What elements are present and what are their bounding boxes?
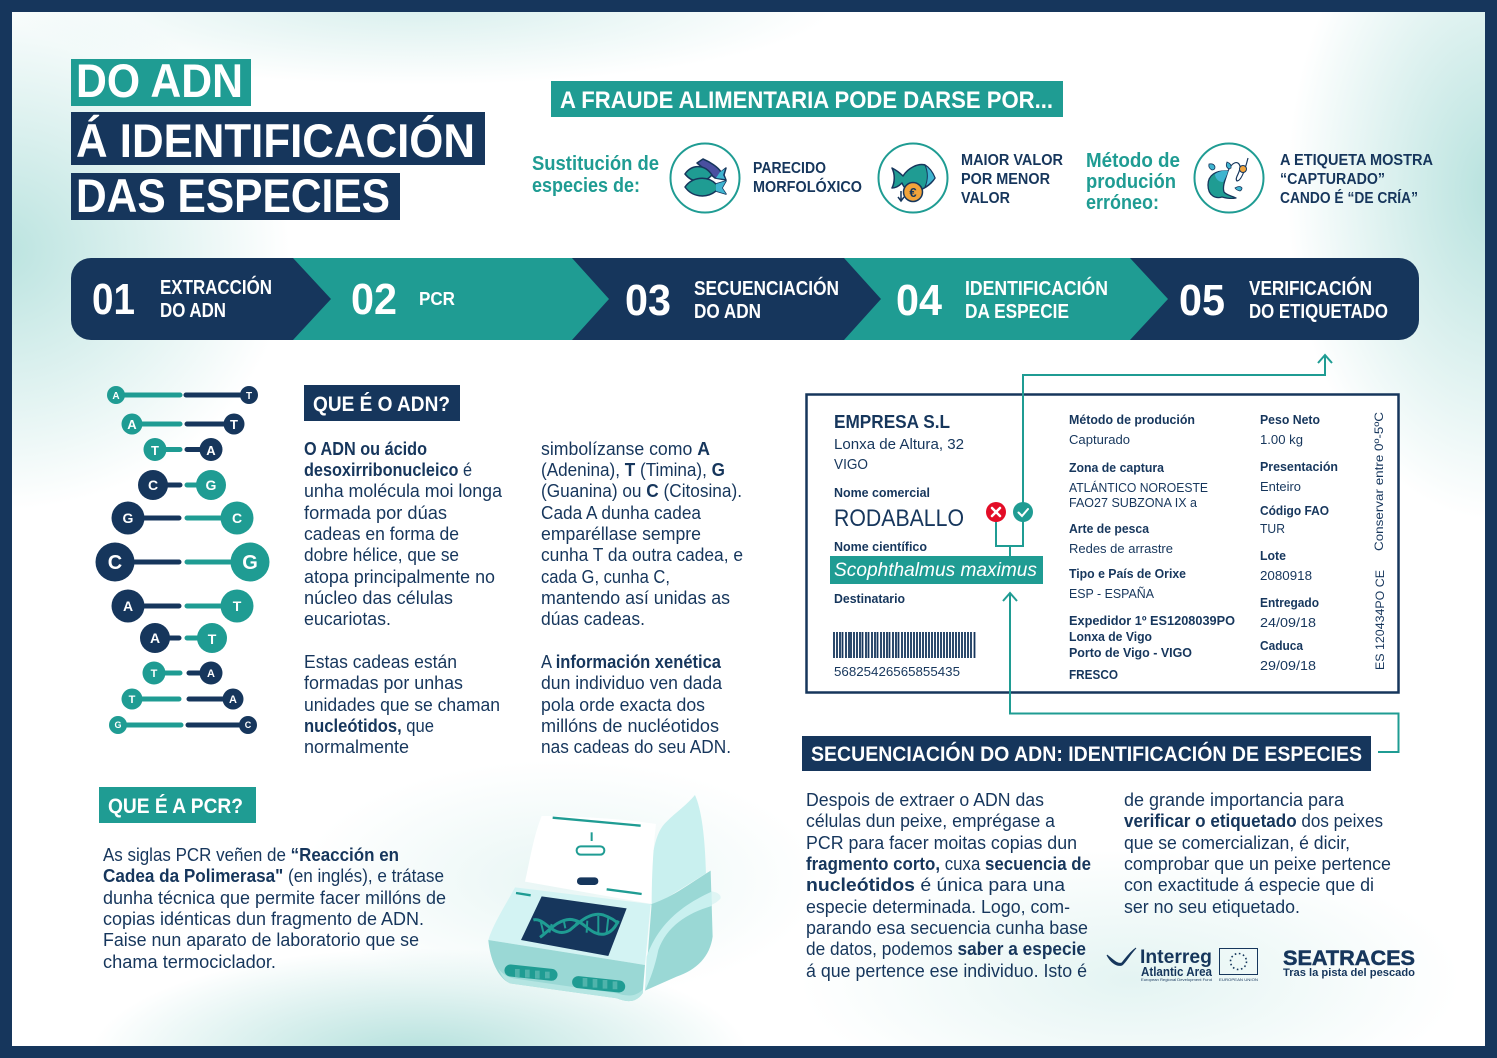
step 05: VERIFICACIÓN xyxy=(1249,276,1372,300)
text: DNA column 2: pola orde exacta dos xyxy=(541,695,705,715)
icon: DNA base pairs: G xyxy=(242,552,258,574)
step 05: 05 xyxy=(1179,276,1225,325)
logo: Seatraces: SEATRACES xyxy=(1283,947,1415,970)
text: PCR explanation: Faise nun aparato de laboratorio que se xyxy=(103,930,419,950)
label: company and names xyxy=(830,412,1043,606)
label: weight and dates: 29/09/18 xyxy=(1260,659,1316,673)
connector: bracket under the marks xyxy=(996,520,1023,556)
label: production details: Zona de captura xyxy=(1069,461,1165,475)
step 03: DO ADN xyxy=(694,301,761,323)
text: DNA column 2: cada G, cunha C, xyxy=(541,567,670,587)
text: sequencing column 2 xyxy=(1124,790,1391,917)
text: DNA column 1: formadas por unhas xyxy=(304,673,463,693)
step 03 xyxy=(625,276,839,325)
text: DNA column 1: unidades que se chaman xyxy=(304,695,500,715)
icon: DNA base pairs: T xyxy=(151,443,159,458)
icon: DNA base pairs: T xyxy=(208,631,217,647)
step 02 xyxy=(351,275,455,324)
label: weight and dates: Lote xyxy=(1260,549,1286,563)
label: production details: Tipo e País de Orixe xyxy=(1069,567,1186,581)
step 04 chevron xyxy=(844,258,1168,340)
logo: Interreg Atlantic Area: European Regional Development Fund xyxy=(1141,977,1212,982)
text: DNA column 2: simbolízanse como A xyxy=(541,439,710,459)
text: wrong production method: Método de xyxy=(1086,150,1180,172)
text: DNA column 2 xyxy=(541,439,743,757)
label: weight and dates: Caduca xyxy=(1260,639,1304,653)
step 04: 04 xyxy=(896,276,942,325)
step 03: SECUENCIACIÓN xyxy=(694,276,839,300)
step 01: 01 xyxy=(92,275,135,324)
text: DNA column 1: Estas cadeas están xyxy=(304,652,457,672)
label: production details: ESP - ESPAÑA xyxy=(1069,587,1155,601)
text: DNA column 1: núcleo das células xyxy=(304,588,453,608)
label: company and names: Nome comercial xyxy=(834,486,930,500)
label: weight and dates: Presentación xyxy=(1260,460,1338,474)
text: sequencing column 1: parando esa secuencia cunha base xyxy=(806,918,1088,938)
label: production details: FRESCO xyxy=(1069,668,1118,682)
text: label shows captured: A ETIQUETA MOSTRA xyxy=(1280,152,1433,169)
label: company and names: Nome científico xyxy=(834,540,927,554)
text: higher value for lower value xyxy=(961,152,1063,207)
text: wrong production method xyxy=(1086,150,1180,214)
label: company and names: RODABALLO xyxy=(834,505,964,532)
panel: what is PCR xyxy=(99,787,721,1001)
label: vertical storage text: Conservar entre 0º-5ºC xyxy=(1372,412,1386,551)
step 04: DA ESPECIE xyxy=(965,301,1069,323)
text: sequencing column 2: verificar o etiquetado dos peixes xyxy=(1124,811,1383,831)
step 02 chevron xyxy=(293,258,609,340)
icon: DNA base pairs: A xyxy=(123,598,133,614)
step 01: DO ADN xyxy=(160,300,226,322)
text: sequencing column 2: de grande importancia para xyxy=(1124,790,1345,810)
label: company and names: Lonxa de Altura, 32 xyxy=(834,437,964,453)
text: PCR explanation: chama termociclador. xyxy=(103,952,276,972)
title: DO ADN xyxy=(76,54,243,107)
icon: DNA base pairs: A xyxy=(150,630,160,646)
heading: what is PCR xyxy=(99,787,256,823)
step 02: 02 xyxy=(351,275,397,324)
label: company and names: Scophthalmus maximus xyxy=(834,560,1037,581)
text: morphological similarity: PARECIDO xyxy=(753,160,826,177)
label: company and names: Destinatario xyxy=(834,592,905,606)
panel: food fraud xyxy=(532,81,1433,214)
icon: DNA base pairs: A xyxy=(229,694,237,706)
title: Á IDENTIFICACIÓN xyxy=(76,114,475,167)
text: DNA column 1: O ADN ou ácido xyxy=(304,439,427,459)
icon: fish with euro: € xyxy=(909,185,917,200)
text: DNA column 1: cadeas en forma de xyxy=(304,524,459,544)
logo: Seatraces xyxy=(1283,947,1415,979)
text: PCR explanation xyxy=(103,845,446,972)
icon: DNA base pairs: A xyxy=(127,417,137,432)
panel: what is DNA xyxy=(304,385,743,757)
text: sequencing column 1 xyxy=(806,790,1091,981)
arrow: correct name to labelling verification xyxy=(1023,355,1332,522)
text: sequencing column 2: comprobar que un peixe pertence xyxy=(1124,854,1391,874)
label: weight and dates: TUR xyxy=(1260,522,1285,536)
icon: DNA base pairs: T xyxy=(230,417,238,432)
text: DNA column 1: unha molécula moi longa xyxy=(304,481,503,501)
heading: DNA sequencing: SECUENCIACIÓN DO ADN: IDENTIFICACIÓN DE ESPECIES xyxy=(811,741,1362,766)
text: sequencing column 1: Despois de extraer o ADN das xyxy=(806,790,1044,810)
text: higher value for lower value: MAIOR VALOR xyxy=(961,152,1063,169)
text: sequencing column 2: que se comercializan, é dicir, xyxy=(1124,833,1350,853)
text: DNA column 2: A información xenética xyxy=(541,652,722,672)
icon: DNA base pairs: G xyxy=(114,720,122,730)
label: company and names: VIGO xyxy=(834,457,868,473)
icon: correct mark xyxy=(1013,502,1033,522)
label: weight and dates: 24/09/18 xyxy=(1260,616,1316,630)
label: production details: Método de produción xyxy=(1069,413,1195,427)
text: DNA column 1: atopa principalmente no xyxy=(304,567,495,587)
heading: food fraud: A FRAUDE ALIMENTARIA PODE DARSE POR... xyxy=(560,87,1053,114)
icon: DNA base pairs: C xyxy=(232,510,242,526)
label: weight and dates: Entregado xyxy=(1260,596,1319,610)
logo: Interreg Atlantic Area xyxy=(1107,947,1258,982)
label: weight and dates: 1.00 kg xyxy=(1260,433,1303,447)
text: sequencing column 1: nucleótidos é única para una xyxy=(806,875,1066,895)
logo: Interreg Atlantic Area: EUROPEAN UNION xyxy=(1219,977,1258,982)
heading: DNA sequencing xyxy=(802,736,1371,771)
text: label shows captured: “CAPTURADO” xyxy=(1280,171,1385,188)
label: production details: Expedidor 1º ES1208039PO xyxy=(1069,614,1235,628)
icon: DNA base pairs: T xyxy=(129,694,136,706)
step 04 xyxy=(896,276,1108,325)
icon: DNA base pairs: T xyxy=(151,668,158,680)
label: weight and dates: 2080918 xyxy=(1260,569,1312,583)
heading: what is PCR: QUE É A PCR? xyxy=(108,795,243,818)
barcode xyxy=(834,632,974,679)
label: production details: ATLÁNTICO NOROESTE xyxy=(1069,480,1208,495)
text: sequencing column 1: de datos, podemos saber a especie xyxy=(806,939,1086,959)
label: production details: Redes de arrastre xyxy=(1069,542,1173,556)
text: morphological similarity xyxy=(753,160,862,196)
text: sequencing column 1: PCR para facer moitas copias dun xyxy=(806,833,1077,853)
text: DNA column 1: nucleótidos, que xyxy=(304,716,434,736)
icon: DNA base pairs: C xyxy=(148,477,158,493)
barcode: 56825426565855435 xyxy=(834,664,960,679)
text: DNA column 2: Cada A dunha cadea xyxy=(541,503,702,523)
text: DNA column 1 xyxy=(304,439,503,757)
icon: DNA base pairs: G xyxy=(206,477,217,493)
label: production details: Lonxa de Vigo xyxy=(1069,630,1152,644)
title xyxy=(71,54,485,222)
text: label shows captured: CANDO É “DE CRÍA” xyxy=(1280,188,1418,207)
label: vertical storage text: ES 120434PO CE xyxy=(1373,570,1387,670)
label: production details: Capturado xyxy=(1069,433,1130,447)
label: production details: FAO27 SUBZONA IX a xyxy=(1069,496,1197,510)
title: DAS ESPECIES xyxy=(76,169,390,222)
panel: DNA sequencing xyxy=(802,736,1391,981)
text: sequencing column 1: especie determinada. Logo, com- xyxy=(806,897,1070,917)
process bar xyxy=(71,258,1419,340)
text: DNA column 2: emparéllase sempre xyxy=(541,524,701,544)
text: species substitution: Sustitución de xyxy=(532,153,659,175)
text: DNA column 2: cunha T da outra cadea, e xyxy=(541,545,743,565)
text: DNA column 1: formada por dúas xyxy=(304,503,447,523)
label: company and names: EMPRESA S.L xyxy=(834,412,950,432)
text: species substitution xyxy=(532,153,659,197)
text: DNA column 1: dobre hélice, que se xyxy=(304,545,459,565)
icon: DNA base pairs: A xyxy=(207,668,215,680)
icon: fish with euro xyxy=(878,144,948,212)
label: production details: Porto de Vigo - VIGO xyxy=(1069,646,1192,660)
text: DNA column 1: normalmente xyxy=(304,737,409,757)
label: weight and dates: Enteiro xyxy=(1260,480,1301,494)
step 03: 03 xyxy=(625,276,671,325)
icon: wrong mark xyxy=(986,502,1006,522)
step 04: IDENTIFICACIÓN xyxy=(965,276,1108,300)
logo: Seatraces: Tras la pista del pescado xyxy=(1283,967,1415,979)
step 01: EXTRACCIÓN xyxy=(160,275,272,299)
text: DNA column 2: (Adenina), T (Timina), G xyxy=(541,460,725,480)
text: morphological similarity: MORFOLÓXICO xyxy=(753,177,862,196)
icon: DNA base pairs: C xyxy=(245,720,252,730)
text: higher value for lower value: VALOR xyxy=(961,190,1010,207)
label: weight and dates: Código FAO xyxy=(1260,504,1329,518)
text: PCR explanation: dunha técnica que permite facer millóns de xyxy=(103,888,446,908)
step 05: DO ETIQUETADO xyxy=(1249,301,1388,323)
icon: DNA base pairs: C xyxy=(108,552,122,574)
text: PCR explanation: As siglas PCR veñen de “Reacción en xyxy=(103,845,399,865)
text: sequencing column 1: células dun peixe, emprégase a xyxy=(806,811,1056,831)
text: DNA column 2: (Guanina) ou C (Citosina). xyxy=(541,481,742,501)
label: vertical storage text xyxy=(1372,412,1387,670)
heading: what is DNA xyxy=(304,385,460,421)
step 02: PCR xyxy=(419,289,455,309)
step 01 xyxy=(92,275,272,324)
text: sequencing column 1: á que pertence ese individuo. Isto é xyxy=(806,961,1087,981)
text: sequencing column 2: con exactitude á especie que di xyxy=(1124,875,1374,895)
text: higher value for lower value: POR MENOR xyxy=(961,171,1050,188)
text: DNA column 2: millóns de nucléotidos xyxy=(541,716,719,736)
icon: thermocycler xyxy=(488,795,721,1001)
text: sequencing column 1: fragmento corto, cuxa secuencia de xyxy=(806,854,1091,874)
text: label shows captured xyxy=(1280,152,1433,207)
text: DNA column 2: mantendo así unidas as xyxy=(541,588,730,608)
text: DNA column 1: desoxirribonucleico é xyxy=(304,460,472,480)
icon: DNA base pairs: T xyxy=(233,598,242,614)
icon: DNA base pairs: T xyxy=(246,391,252,402)
text: DNA column 2: dun individuo ven dada xyxy=(541,673,723,693)
panel: fish label xyxy=(806,394,1398,692)
step 05 xyxy=(1179,276,1388,325)
logo: Interreg Atlantic Area: Interreg xyxy=(1140,947,1212,968)
text: wrong production method: erróneo: xyxy=(1086,192,1159,214)
text: PCR explanation: copias idénticas dun fragmento de ADN. xyxy=(103,909,424,929)
text: DNA column 2: dúas cadeas. xyxy=(541,609,645,629)
icon: two similar fish xyxy=(670,144,740,212)
label: production details: Arte de pesca xyxy=(1069,522,1150,536)
arrow: sequencing to scientific name xyxy=(1003,593,1398,752)
text: PCR explanation: Cadea da Polimerasa" (en inglés), e trátase xyxy=(103,866,444,886)
icon: DNA base pairs: A xyxy=(112,391,120,402)
icon: DNA base pairs xyxy=(96,386,270,734)
text: sequencing column 2: ser no seu etiquetado. xyxy=(1124,897,1300,917)
heading: what is DNA: QUE É O ADN? xyxy=(313,393,450,416)
label: weight and dates xyxy=(1260,413,1338,673)
logo: Interreg Atlantic Area: Atlantic Area xyxy=(1141,965,1213,979)
text: DNA column 1: eucariotas. xyxy=(304,609,391,629)
label: weight and dates: Peso Neto xyxy=(1260,413,1320,427)
icon: hooked fish xyxy=(1194,144,1264,212)
icon: DNA base pairs: A xyxy=(206,443,216,458)
icon: DNA base pairs: G xyxy=(123,510,134,526)
text: DNA column 2: nas cadeas do seu ADN. xyxy=(541,737,731,757)
text: species substitution: especies de: xyxy=(532,175,640,197)
label: production details xyxy=(1069,413,1235,682)
text: wrong production method: produción xyxy=(1086,171,1176,193)
